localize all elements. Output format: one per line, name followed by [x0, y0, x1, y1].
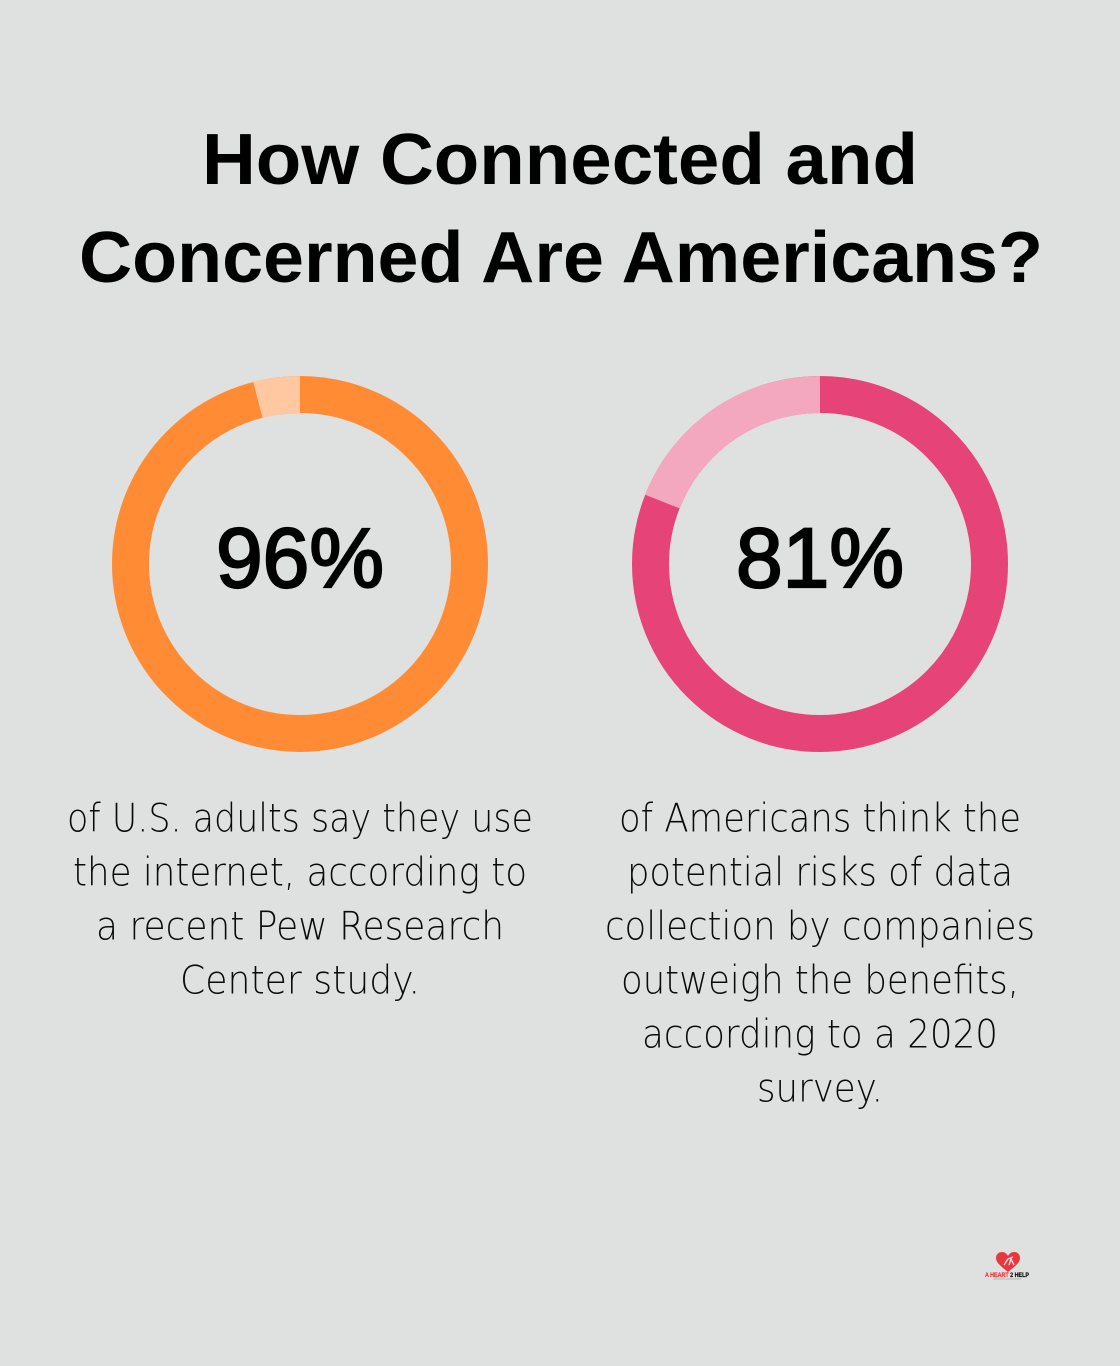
donut chart: 96%	[130, 394, 470, 734]
description: data collection risks: outweigh the benefits,	[621, 958, 1019, 1004]
logo tagline	[993, 1278, 1021, 1280]
title: How Connected and	[202, 120, 918, 200]
panel: 96% stat	[67, 394, 533, 1004]
description: internet use: of U.S. adults say they use	[67, 796, 533, 842]
description: data collection risks: according to a 2020	[642, 1012, 998, 1058]
description: data collection risks: of Americans think the	[619, 796, 1021, 842]
description: internet use: Center study.	[180, 958, 420, 1004]
description: data collection risks: collection by companies	[605, 904, 1035, 950]
description: internet use: a recent Pew Research	[96, 904, 504, 950]
logo wordmark: A HEART 2 HELP	[985, 1273, 1029, 1279]
panel: 81% stat	[605, 394, 1035, 1111]
title	[79, 120, 1043, 298]
value: 96%: 96%	[216, 511, 384, 605]
description: internet use	[67, 796, 533, 1004]
description: data collection risks	[605, 796, 1035, 1112]
donut chart: 81%	[650, 394, 990, 734]
title: Concerned Are Americans?	[79, 218, 1043, 298]
description: data collection risks: survey.	[757, 1066, 883, 1112]
description: internet use: the internet, according to	[73, 850, 527, 896]
value: 81%: 81%	[736, 511, 904, 605]
description: data collection risks: potential risks of data	[627, 850, 1013, 896]
logo: A Heart 2 Help	[985, 1252, 1029, 1280]
icon: heart with figures	[996, 1252, 1020, 1272]
